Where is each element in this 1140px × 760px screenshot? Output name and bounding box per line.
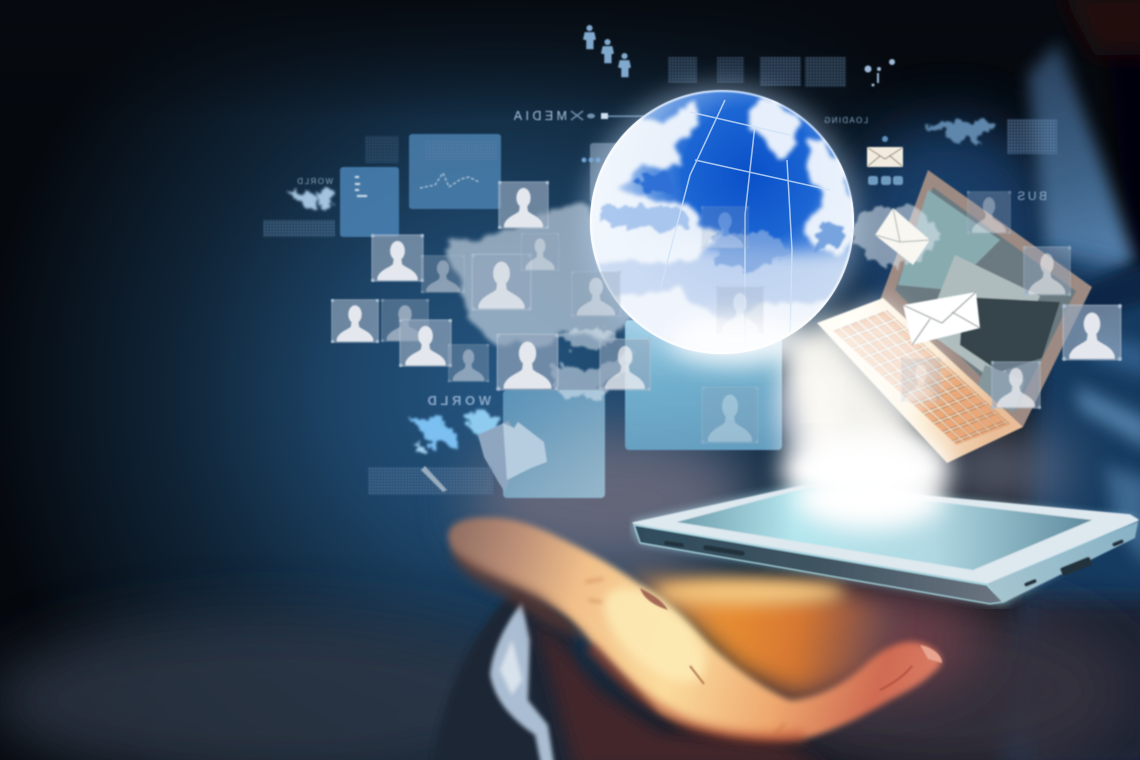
mirrored label: business: BUS: [1015, 189, 1047, 203]
warm shadow under the hand: [535, 615, 830, 760]
card 3: [421, 255, 465, 293]
glow washing out laptop keys: [812, 300, 945, 435]
globe: [570, 84, 860, 370]
globe continents and clouds: [590, 96, 854, 352]
light beam glow from tablet: [670, 316, 950, 508]
card 18: [1062, 304, 1122, 361]
profile cards: [331, 181, 1122, 444]
map scatter over laptop: [853, 205, 937, 265]
laptop screen: [880, 170, 1092, 427]
icon: three people: [583, 25, 631, 77]
tablet top face: [633, 485, 1138, 583]
icon: envelope small: [867, 136, 903, 185]
map at top right: [925, 120, 995, 148]
card 8: [448, 344, 489, 382]
tablet: [633, 485, 1138, 604]
data panel left: [340, 136, 399, 237]
mirrored label: media: [510, 109, 650, 123]
card 9: [496, 333, 559, 391]
white island map strokes: [550, 327, 635, 401]
finger separation line: [880, 666, 912, 690]
card 17: [1023, 246, 1071, 296]
palm highlight: [589, 571, 721, 699]
card 12: [571, 271, 621, 317]
card 1: [498, 181, 549, 229]
tablet body side: [634, 525, 1003, 604]
card 15: [716, 286, 764, 334]
card 4: [471, 253, 532, 311]
mini world map with label: WORLD: [296, 177, 333, 186]
mirrored label: media: MEDIA: [510, 109, 567, 123]
globe blue patches: [600, 170, 846, 272]
mirrored label: world: WORLD: [424, 393, 491, 408]
tablet edge glow: [633, 485, 1138, 604]
palm crease: [640, 588, 668, 610]
back data panels top row: [668, 57, 1057, 154]
laptop: [817, 170, 1092, 463]
translucent cyan panel center: [625, 320, 782, 450]
card 21: [901, 358, 941, 402]
card 16: [967, 191, 1011, 234]
blurred person: dark head and shirt at right: [1000, 0, 1140, 760]
mini world map with label: [263, 177, 336, 237]
translucent pale panel bottom left: [503, 390, 605, 498]
card 20: [801, 376, 844, 424]
large translucent world map: [445, 204, 640, 347]
mirrored label: loading: LOADING: [823, 116, 868, 125]
card 13: [701, 386, 759, 444]
card 14: [701, 206, 749, 249]
globe lower haze: [597, 240, 850, 311]
card 6: [381, 299, 429, 342]
card 10: [599, 338, 651, 391]
card 19: [991, 361, 1041, 409]
globe grid lines: [660, 100, 830, 345]
tablet screen: [677, 487, 1092, 570]
laptop keyboard base: [817, 298, 1023, 463]
blue world map with australia: [368, 409, 547, 495]
hand with outstretched fingers: [448, 518, 942, 739]
icon: envelope on laptop screen lower: [903, 292, 980, 345]
tablet ports: [664, 539, 1124, 587]
data panel chart: [409, 134, 501, 209]
palm lower rim: [590, 645, 805, 738]
icon: envelope on laptop screen upper: [875, 208, 930, 265]
shirt sleeve with white cuff: [433, 588, 590, 760]
card 11: [521, 233, 559, 271]
icon: network nodes: [864, 59, 895, 86]
rear small card and dots left of globe: [582, 143, 618, 203]
tablet central light burst: [795, 466, 945, 530]
card 5: [331, 299, 379, 343]
finger creases: [585, 579, 785, 735]
card 7: [399, 319, 452, 367]
warm mauve and orange glow below tablet: [470, 430, 1130, 760]
card 2: [371, 234, 424, 282]
finger underside shadow: [450, 548, 590, 640]
palm line: [690, 666, 704, 684]
fingernail: [920, 645, 942, 663]
